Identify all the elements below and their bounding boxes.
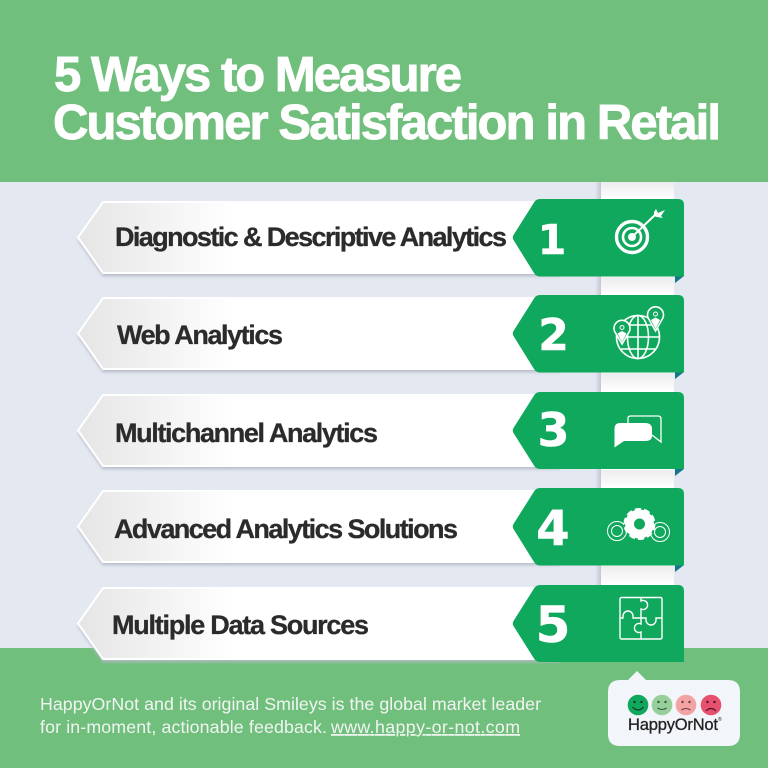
label arrow 3 <box>78 395 560 466</box>
icon: gears <box>608 508 670 542</box>
footer text: www.happy-or-not.com <box>330 717 520 737</box>
label arrow 2 <box>78 298 560 369</box>
smiley: unhappy <box>701 695 721 715</box>
fold 1 <box>675 276 684 283</box>
smiley: happy <box>628 695 648 715</box>
fold 3 <box>675 469 684 476</box>
label arrow 5 <box>78 588 560 659</box>
label text 4: Advanced Analytics Solutions <box>114 514 458 544</box>
footer text <box>40 694 541 737</box>
green tab 5 <box>513 585 684 662</box>
label text 1: Diagnostic & Descriptive Analytics <box>115 222 507 252</box>
number 2: 2 <box>538 310 569 361</box>
footer text: for in-moment, actionable feedback. <box>40 717 327 737</box>
bubble <box>608 671 740 746</box>
number 3: 3 <box>537 403 570 457</box>
icon: target with arrow <box>616 209 665 252</box>
wordmark: HappyOrNot <box>628 716 718 734</box>
icon: chat bubbles <box>614 416 661 448</box>
green tab 4 <box>513 488 684 566</box>
icon: puzzle <box>620 598 662 639</box>
title: Customer Satisfaction in Retail <box>53 96 721 150</box>
smiley: slightly happy <box>652 695 672 715</box>
row 5: Multiple Data Sources <box>78 585 684 662</box>
green tab 2 <box>513 295 684 372</box>
header band <box>0 0 768 182</box>
shadow 1 <box>78 205 560 276</box>
shadow 3 <box>78 398 560 469</box>
registered mark: ® <box>718 716 722 723</box>
shadow 2 <box>78 301 560 372</box>
green tab 1 <box>513 199 684 276</box>
icon: globe with map pins <box>614 307 664 358</box>
label text 5: Multiple Data Sources <box>112 610 369 640</box>
footer text: HappyOrNot and its original Smileys is the global market leader <box>40 694 541 714</box>
number 1: 1 <box>538 216 566 264</box>
number 5: 5 <box>536 596 570 654</box>
row 2: Web Analytics <box>78 295 684 379</box>
vertical white band <box>595 182 674 648</box>
row 1: Diagnostic and Descriptive Analytics <box>78 199 684 283</box>
label arrow 1 <box>78 202 560 273</box>
shadow 4 <box>78 494 560 565</box>
fold 4 <box>675 565 684 572</box>
shadow 5 <box>78 591 560 662</box>
fold 2 <box>675 372 684 379</box>
label text 2: Web Analytics <box>117 320 283 350</box>
logo: HappyOrNot speech bubble <box>608 671 740 746</box>
label text 3: Multichannel Analytics <box>115 418 378 448</box>
row 3: Multichannel Analytics <box>78 392 684 476</box>
title <box>53 48 721 150</box>
number 4: 4 <box>536 501 570 557</box>
footer band <box>0 648 768 768</box>
row 4: Advanced Analytics Solutions <box>78 488 684 572</box>
title: 5 Ways to Measure <box>54 48 462 102</box>
green tab 3 <box>513 392 684 469</box>
label arrow 4 <box>78 491 560 562</box>
smiley: slightly unhappy <box>676 695 696 715</box>
